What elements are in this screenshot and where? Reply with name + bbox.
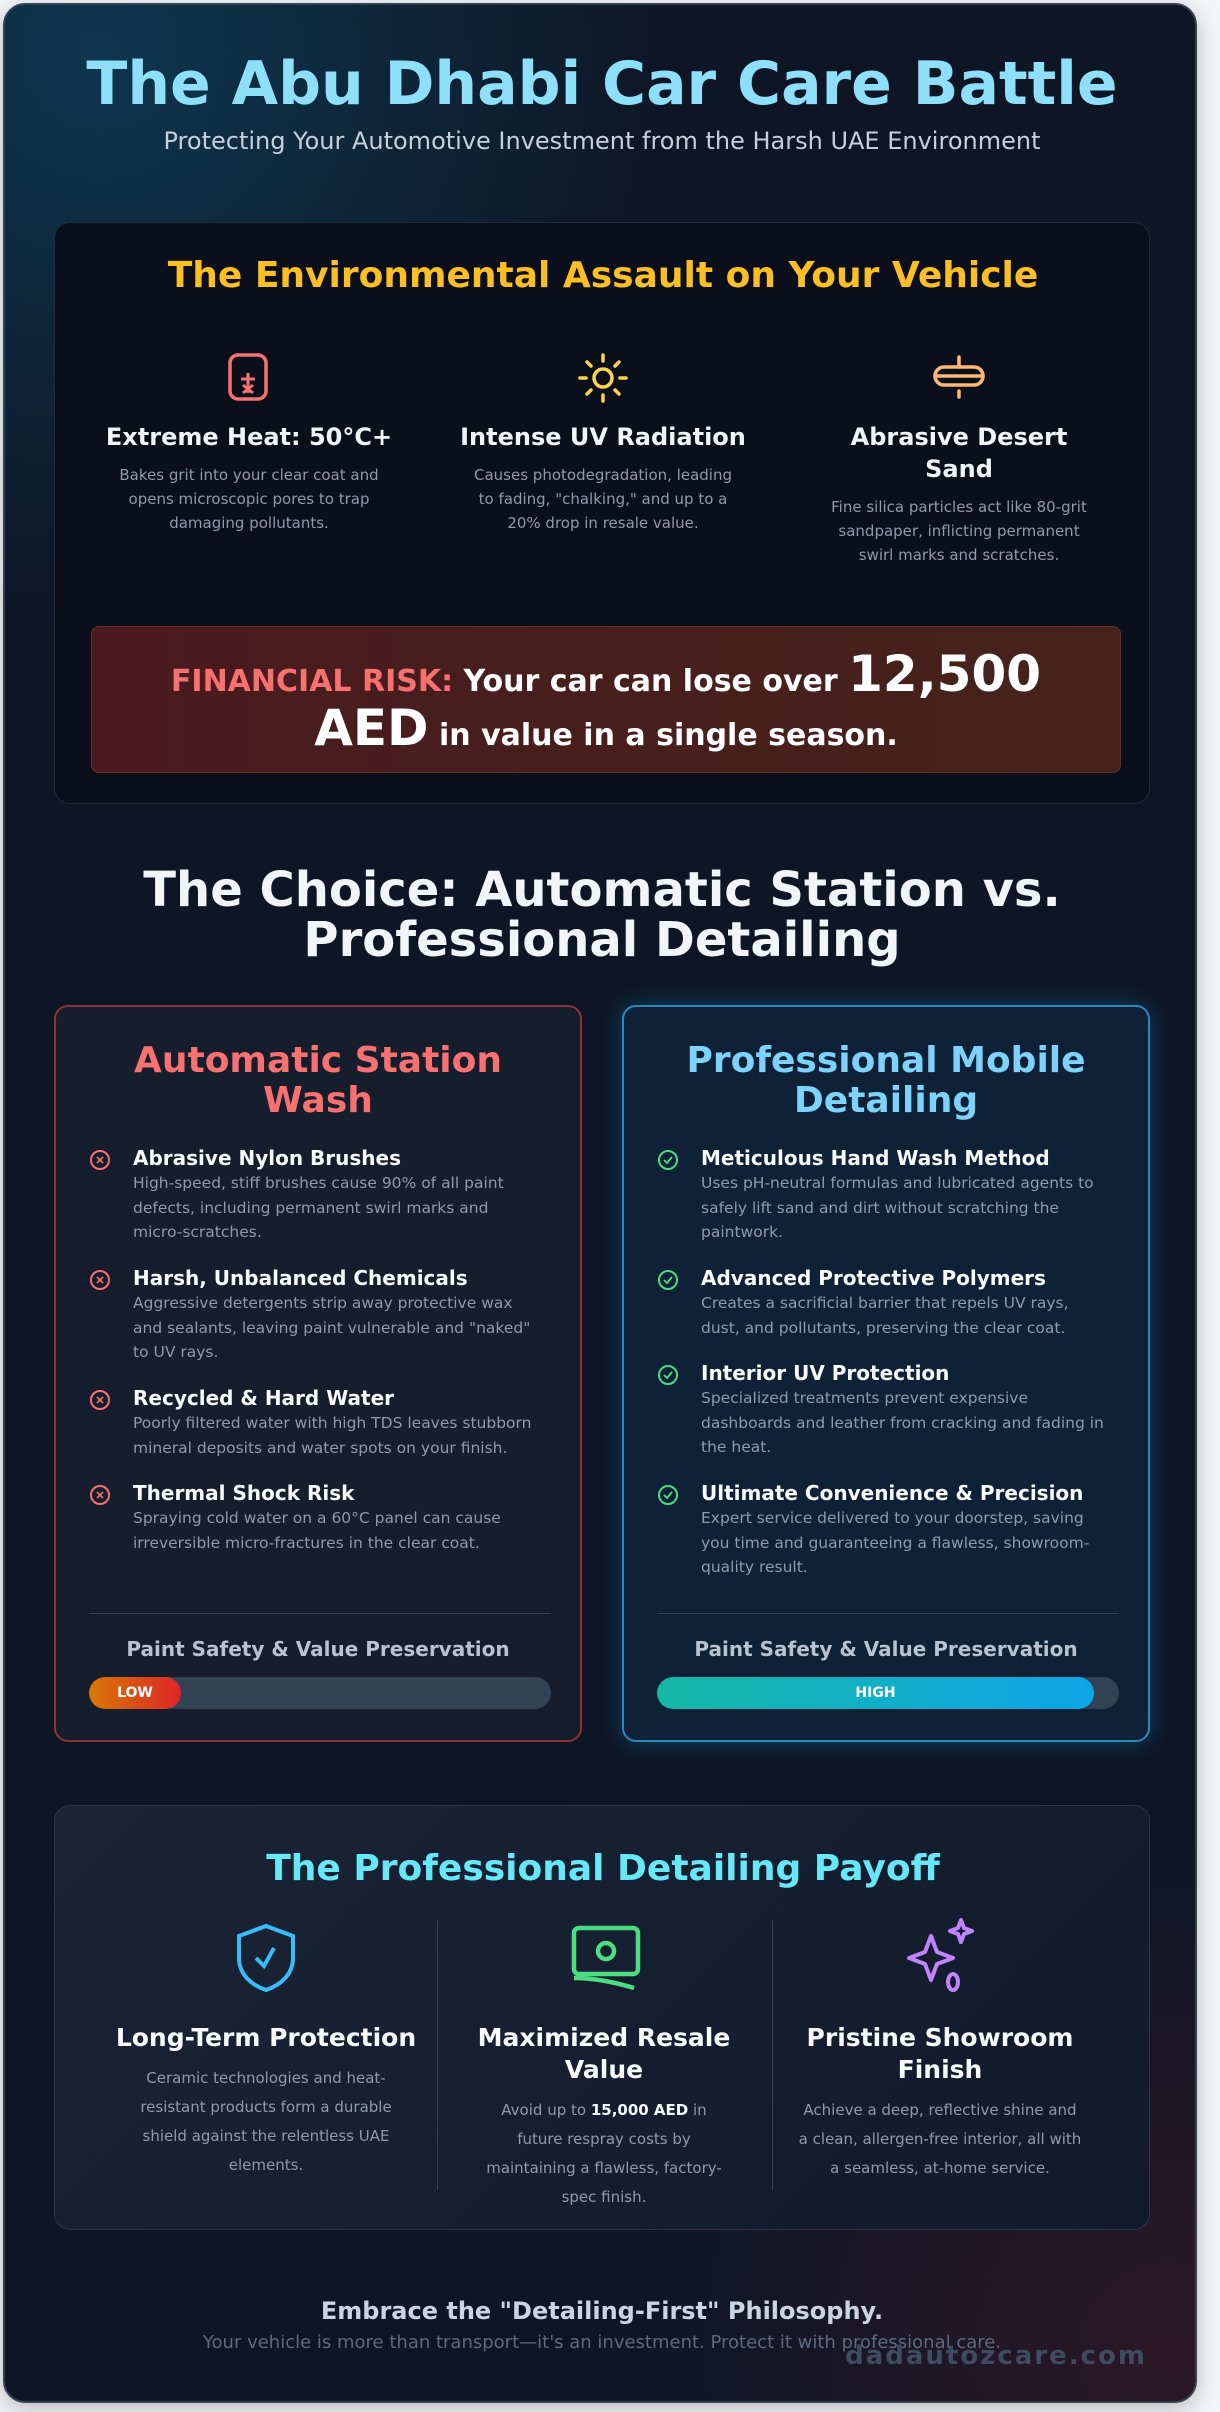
meter: low: LOW	[117, 1685, 153, 1701]
item: interior UV	[658, 1361, 1104, 1456]
payoff column: protection	[116, 2023, 416, 2174]
payoff column: finish: Pristine Showroom	[807, 2023, 1073, 2052]
column: sand: Fine silica particles act like 80-grit sandpaper, inflicting permanent swirl marks and scratches.	[831, 498, 1087, 564]
meter: low	[89, 1677, 551, 1709]
watermark: dadautozcare.com	[845, 2341, 1147, 2371]
payoff column: resale	[478, 2023, 730, 2206]
panel: automatic station wash: Automatic Station	[134, 1040, 502, 1081]
meter: high: HIGH	[855, 1685, 896, 1701]
panel: automatic station wash	[54, 1005, 582, 1742]
column: heat: Extreme Heat: 50°C+	[106, 423, 392, 451]
column: sand	[831, 355, 1087, 564]
callout: financial risk: FINANCIAL RISK: Your car can lose over 12,500	[171, 645, 1041, 703]
column: heat	[106, 353, 392, 532]
item: water: Poorly filtered water with high TDS leaves stubborn mineral deposits and water spots on your finish.	[133, 1414, 531, 1456]
payoff heading: The Professional Detailing Payoff	[266, 1848, 940, 1889]
item: water: Recycled & Hard Water	[133, 1386, 394, 1410]
item: chemicals: and sealants, leaving paint vulnerable and "naked"	[133, 1318, 530, 1336]
payoff column: protection: Long-Term Protection	[116, 2023, 416, 2052]
item: polymers: dust, and pollutants, preserving the clear coat.	[701, 1318, 1065, 1336]
icon: money	[572, 1926, 640, 1990]
item: polymers	[658, 1266, 1069, 1336]
env heading: The Environmental Assault on Your Vehicle	[168, 255, 1038, 296]
item: brushes: micro-scratches.	[133, 1223, 262, 1241]
item: water	[90, 1386, 531, 1456]
item: chemicals: to UV rays.	[133, 1343, 218, 1361]
payoff column: finish: a clean, allergen-free interior, all with	[799, 2130, 1081, 2148]
icon: sparkles	[906, 1918, 974, 1992]
payoff column: resale: Value	[565, 2055, 643, 2084]
payoff column: finish	[799, 2023, 1081, 2177]
item: convenience: quality result.	[701, 1558, 808, 1576]
payoff column: protection: Ceramic technologies and heat-resistant products form a durable shield against the relentless UAE elements.	[140, 2069, 392, 2174]
heading: the choice: The Choice: Automatic Station vs.	[143, 862, 1061, 918]
column: heat: Bakes grit into your clear coat and opens microscopic pores to trap damaging pollutants.	[119, 466, 379, 532]
item: interior UV: Interior UV Protection	[701, 1361, 949, 1385]
payoff column: finish: a seamless, at-home service.	[830, 2159, 1050, 2177]
heading: the choice: Professional Detailing	[303, 912, 901, 968]
item: convenience	[658, 1481, 1089, 1576]
title: The Abu Dhabi Car Care Battle	[86, 49, 1118, 119]
payoff column: finish: Achieve a deep, reflective shine and	[803, 2101, 1077, 2119]
footer heading: Embrace the "Detailing-First" Philosophy.	[321, 2297, 883, 2325]
item: chemicals	[90, 1266, 530, 1361]
footer text: Your vehicle is more than transport—it's an investment. Protect it with professional care.	[203, 2332, 1001, 2353]
item: convenience: you time and guaranteeing a flawless, showroom-	[701, 1534, 1089, 1552]
panel: professional mobile detailing	[622, 1005, 1150, 1742]
item: thermal shock	[90, 1481, 501, 1552]
payoff column: resale: Maximized Resale	[478, 2023, 730, 2052]
icon: sun	[578, 353, 628, 403]
panel: payoff	[54, 1805, 1150, 2230]
callout: financial risk: AED in value in a single season.	[314, 699, 898, 757]
icon: sand	[933, 355, 985, 399]
item: hand wash: Meticulous Hand Wash Method	[701, 1146, 1050, 1170]
column: UV	[460, 353, 746, 532]
panel: professional mobile detailing: Detailing	[794, 1080, 978, 1121]
item: chemicals: Harsh, Unbalanced Chemicals	[133, 1266, 468, 1290]
item: brushes: Abrasive Nylon Brushes	[133, 1146, 401, 1170]
panel: automatic station wash: Wash	[263, 1080, 373, 1121]
icon: shield	[237, 1924, 295, 1992]
item: interior UV: the heat.	[701, 1438, 771, 1456]
item: polymers: Creates a sacrificial barrier that repels UV rays,	[701, 1294, 1069, 1312]
payoff column: resale: Avoid up to 15,000 AED in future respray costs by maintaining a flawless, factory-spec finish.	[486, 2101, 722, 2206]
item: brushes: High-speed, stiff brushes cause 90% of all paint defects, including permanent swirl marks and	[133, 1174, 504, 1216]
meter label: Paint Safety & Value Preservation	[694, 1637, 1078, 1661]
column: UV: Causes photodegradation, leading to fading, "chalking," and up to a 20% drop in resale value.	[474, 466, 732, 532]
subtitle: Protecting Your Automotive Investment from the Harsh UAE Environment	[164, 127, 1040, 155]
meter: high	[657, 1677, 1119, 1709]
item: polymers: Advanced Protective Polymers	[701, 1266, 1046, 1290]
item: convenience: Expert service delivered to your doorstep, saving	[701, 1509, 1084, 1527]
callout: financial risk	[91, 626, 1121, 773]
icon: heat	[228, 353, 268, 401]
heading: the choice	[143, 862, 1061, 968]
meter label: Paint Safety & Value Preservation	[126, 1637, 510, 1661]
item: interior UV: Specialized treatments prevent expensive	[701, 1389, 1028, 1407]
column: sand: Abrasive Desert Sand	[851, 423, 1067, 483]
item: chemicals: Aggressive detergents strip away protective wax	[133, 1294, 513, 1312]
payoff column: finish: Finish	[898, 2055, 982, 2084]
item: hand wash: Uses pH-neutral formulas and lubricated agents to safely lift sand and dirt without scratching the paintwork.	[701, 1174, 1094, 1241]
item: thermal shock: Thermal Shock Risk	[133, 1481, 354, 1505]
item: hand wash	[658, 1146, 1094, 1241]
panel: environmental assault	[54, 222, 1150, 804]
item: interior UV: dashboards and leather from cracking and fading in	[701, 1414, 1104, 1432]
column: UV: Intense UV Radiation	[460, 423, 746, 451]
item: brushes	[90, 1146, 504, 1241]
item: thermal shock: Spraying cold water on a 60°C panel can cause irreversible micro-fractures in the clear coat.	[133, 1509, 501, 1552]
item: convenience: Ultimate Convenience & Precision	[701, 1481, 1083, 1505]
panel: professional mobile detailing: Professional Mobile	[686, 1040, 1086, 1081]
